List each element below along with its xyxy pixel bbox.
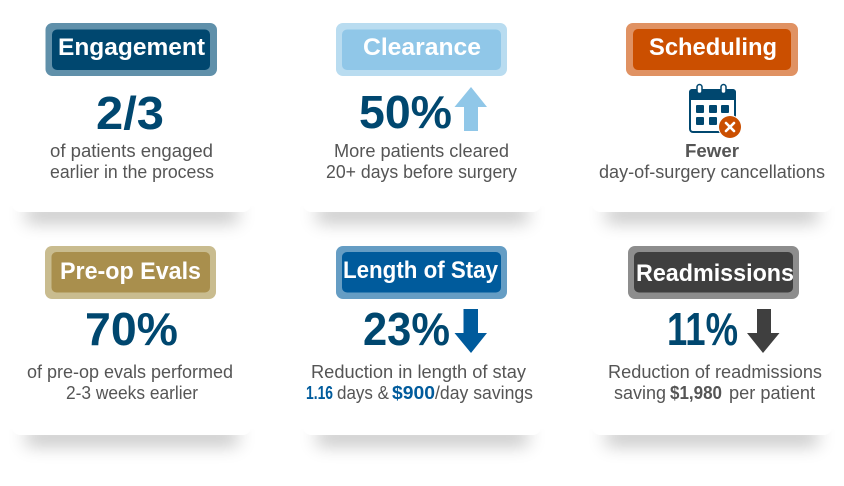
- badge: engagement: Engagement: [58, 34, 205, 61]
- text: length of stay description: 1.16: [306, 383, 333, 403]
- arrow: down: [747, 309, 780, 353]
- panel: scheduling: [592, 20, 832, 222]
- text: engagement description: earlier in the process: [50, 162, 214, 182]
- badge: readmissions: [628, 246, 799, 299]
- arrow: down: [454, 309, 487, 353]
- panel: clearance: [303, 20, 541, 222]
- stat: 23%: 23%: [363, 303, 450, 355]
- text: readmissions description: per patient: [729, 383, 815, 403]
- stat: 70%: 70%: [85, 303, 178, 355]
- text: length of stay description: [306, 362, 533, 403]
- icon: calendar with cancel mark: [689, 84, 742, 139]
- badge: clearance: [336, 23, 507, 76]
- text: pre-op description: 2-3 weeks earlier: [66, 383, 198, 403]
- text: scheduling description: Fewer: [685, 141, 739, 161]
- badge: pre-op evals: Pre-op Evals: [60, 258, 201, 285]
- stat: 11%: 11%: [667, 303, 738, 355]
- text: engagement description: of patients engaged: [50, 141, 213, 161]
- arrow: up: [454, 87, 487, 131]
- badge: pre-op evals: [45, 246, 216, 299]
- text: clearance description: More patients cleared: [334, 141, 509, 161]
- text: clearance description: 20+ days before surgery: [326, 162, 517, 182]
- text: readmissions description: [608, 362, 822, 403]
- badge: clearance: Clearance: [363, 34, 481, 61]
- text: length of stay description: days &: [337, 383, 389, 403]
- text: readmissions description: saving: [614, 383, 666, 403]
- stat: 50%: 50%: [359, 86, 452, 138]
- badge: scheduling: [626, 23, 798, 76]
- panel: readmissions: [592, 240, 832, 445]
- text: scheduling description: day-of-surgery cancellations: [599, 162, 825, 182]
- badge: readmissions: Readmissions: [636, 260, 794, 287]
- badge: engagement: [46, 23, 217, 76]
- text: length of stay description: Reduction in length of stay: [311, 362, 526, 382]
- badge: scheduling: Scheduling: [649, 34, 777, 61]
- panel: engagement: [12, 20, 251, 222]
- panel: length of stay: [303, 240, 541, 445]
- text: length of stay description: $900: [392, 383, 435, 403]
- text: clearance description: [326, 141, 517, 182]
- badge: length of stay: Length of Stay: [343, 257, 499, 284]
- badge: length of stay: [336, 246, 507, 299]
- text: length of stay description: /day savings: [435, 383, 533, 403]
- text: readmissions description: $1,980: [670, 383, 722, 403]
- text: readmissions description: Reduction of readmissions: [608, 362, 822, 382]
- stat: 2/3: 2/3: [96, 87, 164, 139]
- text: scheduling description: [599, 141, 825, 182]
- text: engagement description: [50, 141, 214, 182]
- panel: pre-op evals: [12, 240, 251, 445]
- text: pre-op description: of pre-op evals performed: [27, 362, 233, 382]
- text: pre-op description: [27, 362, 233, 403]
